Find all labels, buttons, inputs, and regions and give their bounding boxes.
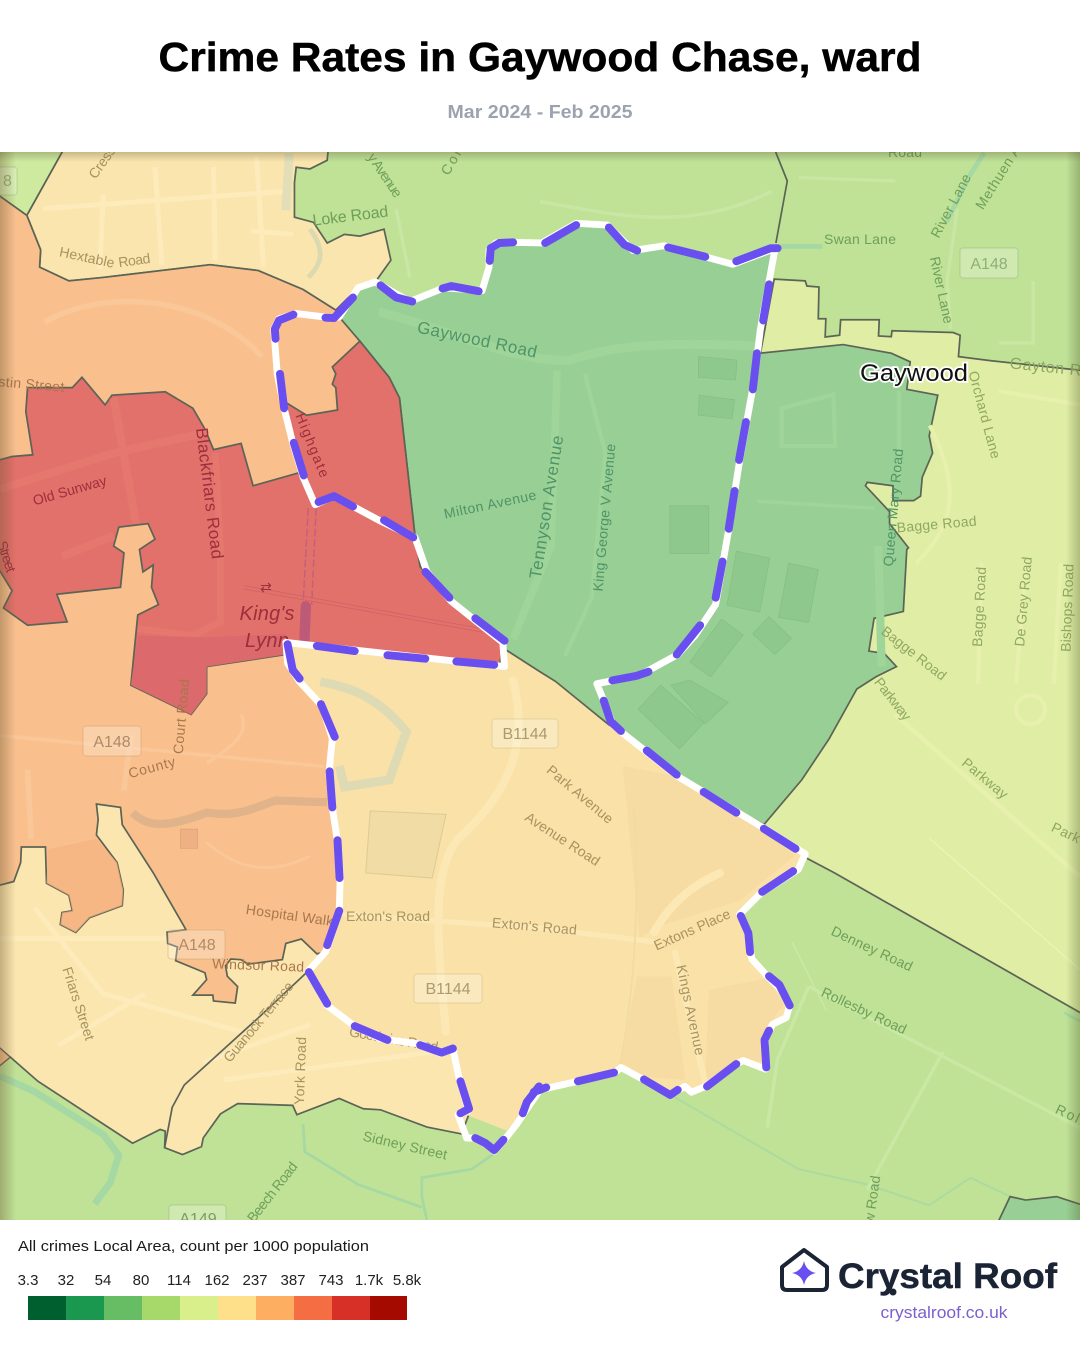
legend values: 1.7k [355, 1272, 384, 1289]
river in ward [320, 682, 406, 787]
street labels: De Grey Road [1011, 556, 1035, 647]
orange darker lower tone [46, 839, 123, 932]
street labels: Hextable [58, 243, 116, 271]
red road details [110, 398, 207, 540]
orange canal [133, 801, 327, 824]
region: south-east corner green [998, 1196, 1080, 1220]
street labels: Rollesby Road [819, 984, 909, 1037]
street labels: Parkway [959, 754, 1011, 802]
region: north cream [27, 143, 391, 310]
region: town centre red [0, 341, 503, 714]
street labels: Bagge Road [878, 623, 950, 683]
road number boxes: A148 [178, 937, 216, 954]
street labels: Gaywood Road [416, 318, 539, 362]
street labels: Bagge Road [969, 566, 989, 647]
street labels: Gayton R [1009, 355, 1080, 380]
region: Gaywood Chase north green [339, 223, 938, 825]
region: east light green [760, 279, 1080, 1017]
green road details [876, 615, 886, 656]
street labels: Goodwins Road [348, 1023, 440, 1055]
street labels: Beech Road [244, 1159, 301, 1225]
orange road details [0, 302, 324, 868]
road number boxes: A148 [970, 256, 1008, 273]
street labels: Bishops Road [1057, 564, 1077, 652]
ward darker blocks [620, 766, 795, 1084]
title: Crime Rates in Gaywood Chase, ward [158, 34, 922, 80]
street labels: Methuen A [972, 142, 1024, 212]
street labels: Court Road [170, 679, 192, 755]
brand logo [782, 1250, 1057, 1322]
street labels: Hospital Walk [245, 901, 335, 929]
street labels: Cress [85, 143, 119, 181]
street labels: King's [240, 603, 294, 625]
street labels: ⇄ [260, 579, 272, 595]
east yellow roads [928, 424, 1080, 970]
street labels: York Road [291, 1037, 309, 1105]
region: south-west cream [0, 805, 470, 1156]
region: west orange [0, 196, 358, 1004]
street labels: Road [117, 250, 151, 270]
street labels: y Avenue [365, 150, 406, 201]
streams and water [0, 153, 1080, 1221]
legend values [18, 1272, 422, 1289]
railway tunnel marks [303, 508, 316, 605]
building block [366, 811, 446, 878]
website: crystalroof.co.uk [880, 1303, 1008, 1322]
street labels: w Road [861, 1174, 883, 1225]
dark boundary north [774, 148, 787, 243]
subtitle: date range: Mar 2024 - Feb 2025 [448, 102, 632, 122]
street labels: Lynn [245, 630, 289, 652]
legend values: 54 [95, 1272, 111, 1289]
region: south-west dividing line [165, 971, 308, 1148]
street labels: Guanock Terrace [220, 978, 297, 1065]
brand name: Crystal Roof [838, 1257, 1057, 1296]
street labels: River Lane [927, 255, 957, 325]
street labels: Orchard Lane [965, 369, 1004, 460]
street labels: Sidney Street [361, 1128, 449, 1163]
legend values: 237 [242, 1272, 268, 1289]
north cream roads and water [43, 153, 320, 277]
road number boxes: A149 [179, 1211, 217, 1228]
ward boundary purple dashes [275, 225, 796, 1150]
map edge vignette [0, 152, 1080, 1220]
street labels: Exton's Road [491, 914, 577, 938]
street labels: Queen Mary Road [880, 448, 906, 567]
legend colour scale [28, 1296, 407, 1320]
road number boxes: B1144 [502, 726, 548, 743]
icon: house with star [782, 1250, 827, 1290]
ward road details [344, 680, 720, 1087]
street labels: River Lane [927, 171, 974, 240]
street labels: Extons Place [651, 905, 733, 953]
street labels: Milton Avenue [442, 486, 538, 522]
street labels: County [126, 753, 177, 781]
legend values: 3.3 [18, 1272, 38, 1289]
legend title: All crimes Local Area, count per 1000 population [18, 1238, 369, 1255]
street labels: Loke Road [312, 203, 389, 230]
street labels: Highgate [292, 411, 333, 480]
street labels: Friars Street [59, 965, 98, 1042]
legend [18, 1238, 422, 1320]
street labels: Col [437, 147, 464, 178]
legend values: 5.8k [393, 1272, 422, 1289]
legend values: 114 [167, 1272, 191, 1289]
region: north-west corner low crime [0, 152, 62, 214]
south-west cream roads [0, 908, 430, 1080]
orange fragment at west edge [0, 1047, 10, 1066]
street labels: Blackfriars Road [192, 427, 227, 560]
street labels: Kings Avenue [674, 963, 708, 1057]
street labels: Windsor Road [212, 955, 304, 975]
green sports pitches [638, 357, 818, 749]
street labels: Park Avenue [544, 762, 617, 827]
legend values: 32 [58, 1272, 74, 1289]
north green roads [396, 178, 1033, 343]
red darker station district [131, 634, 286, 714]
street labels: Denney Road [829, 923, 915, 974]
street labels: Exton's Road [346, 908, 430, 924]
legend values: 80 [133, 1272, 149, 1289]
legend values: 387 [280, 1272, 306, 1289]
ward boundary white line [274, 223, 805, 1151]
street labels: Swan Lane [824, 231, 896, 247]
road number boxes: B1144 [425, 981, 471, 998]
street labels: Road [888, 144, 922, 160]
street labels: Bagge Road [896, 513, 977, 535]
street labels: Tennyson Avenue [526, 434, 567, 580]
street labels: Parkway [871, 674, 915, 724]
road number boxes [0, 167, 1018, 1234]
street labels: Old Sunway [31, 472, 108, 508]
legend values: 743 [318, 1272, 344, 1289]
region: ward south cream [286, 642, 805, 1130]
ward boundary [274, 223, 805, 1151]
street labels: Avenue Road [522, 809, 603, 869]
road number boxes: A148 [93, 734, 131, 751]
south-east green roads [767, 942, 1080, 1190]
road number boxes: 8 [3, 173, 12, 190]
legend values: 162 [204, 1272, 230, 1289]
place label: Gaywood: Gaywood [860, 360, 968, 387]
street labels: King George V Avenue [590, 443, 618, 592]
